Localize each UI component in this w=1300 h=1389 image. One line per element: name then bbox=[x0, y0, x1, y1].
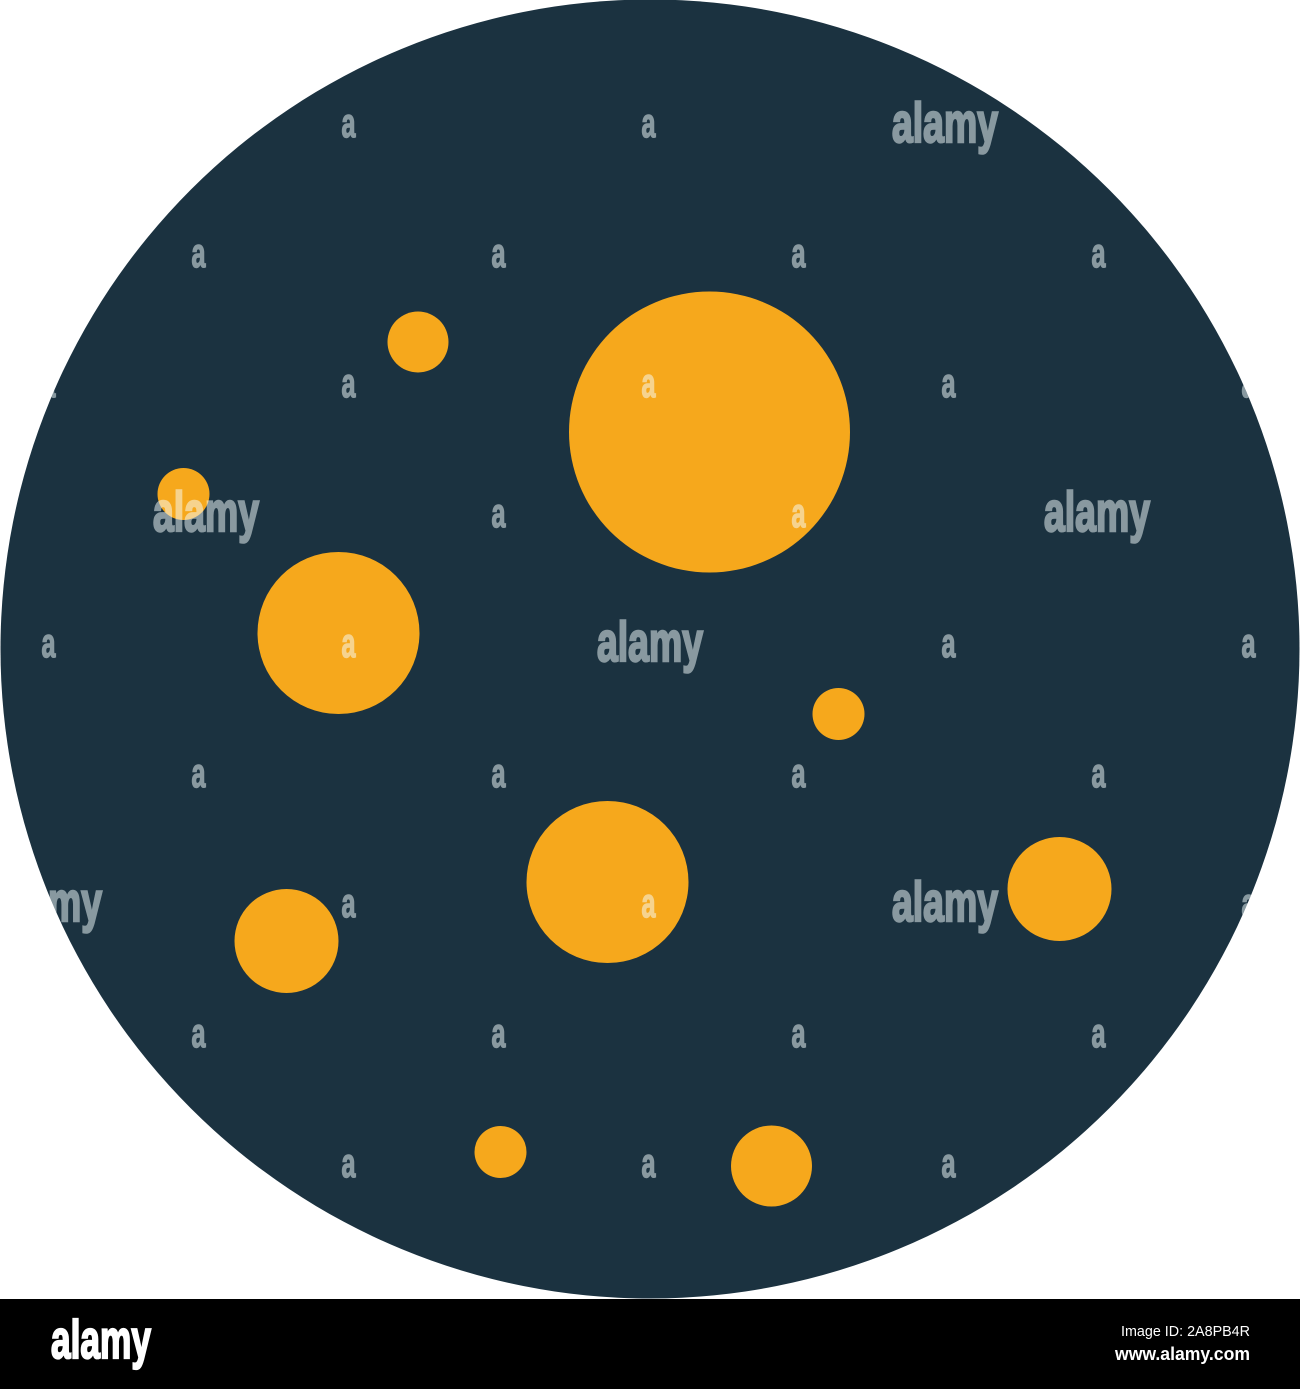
watermark: large logos: alamy bbox=[0, 870, 102, 933]
watermark: small letters: a bbox=[192, 230, 206, 276]
footer bar bbox=[0, 1299, 1300, 1389]
watermark: small letters: a bbox=[1092, 1010, 1106, 1056]
watermark: small letters: a bbox=[492, 750, 506, 796]
watermark: small letters: a bbox=[1092, 230, 1106, 276]
footer logo: alamy bbox=[51, 1310, 151, 1370]
watermark: small letters: a bbox=[192, 750, 206, 796]
watermark: small letters: a bbox=[42, 360, 56, 406]
watermark: large logos: alamy bbox=[153, 480, 259, 543]
watermark: small letters: a bbox=[342, 1140, 356, 1186]
watermark: small letters: a bbox=[342, 620, 356, 666]
watermark: small letters: a bbox=[942, 1140, 956, 1186]
watermark: small letters: a bbox=[942, 620, 956, 666]
watermark: large logos: alamy bbox=[597, 610, 703, 673]
watermark: small letters: a bbox=[492, 230, 506, 276]
watermark: small letters: a bbox=[642, 880, 656, 926]
watermark: small letters: a bbox=[792, 1010, 806, 1056]
watermark: small letters: a bbox=[342, 100, 356, 146]
watermark: small letters: a bbox=[1242, 880, 1256, 926]
watermark: small letters: a bbox=[942, 360, 956, 406]
watermark: small letters: a bbox=[1092, 750, 1106, 796]
image id: Image ID: 2A8PB4R bbox=[1121, 1323, 1250, 1340]
watermark: small letters: a bbox=[492, 490, 506, 536]
watermark: small letters bbox=[42, 100, 1256, 1186]
watermark: large logos bbox=[0, 91, 1150, 933]
watermark: small letters: a bbox=[792, 490, 806, 536]
watermark: large logos: alamy bbox=[892, 91, 998, 154]
watermark: small letters: a bbox=[642, 360, 656, 406]
watermark: large logos: alamy bbox=[1044, 480, 1150, 543]
watermark: large logos: alamy bbox=[892, 870, 998, 933]
watermark pattern bbox=[0, 91, 1256, 1186]
watermark: small letters: a bbox=[492, 1010, 506, 1056]
watermark: small letters: a bbox=[342, 360, 356, 406]
watermark: small letters: a bbox=[1242, 620, 1256, 666]
watermark: small letters: a bbox=[1242, 360, 1256, 406]
watermark: small letters: a bbox=[342, 880, 356, 926]
website: www.alamy.com bbox=[1114, 1344, 1250, 1364]
orange dots bbox=[158, 292, 1112, 1206]
watermark: small letters: a bbox=[42, 620, 56, 666]
watermark: small letters: a bbox=[642, 1140, 656, 1186]
watermark: small letters: a bbox=[792, 230, 806, 276]
watermark: small letters: a bbox=[792, 750, 806, 796]
watermark: small letters: a bbox=[192, 1010, 206, 1056]
watermark: small letters: a bbox=[642, 100, 656, 146]
